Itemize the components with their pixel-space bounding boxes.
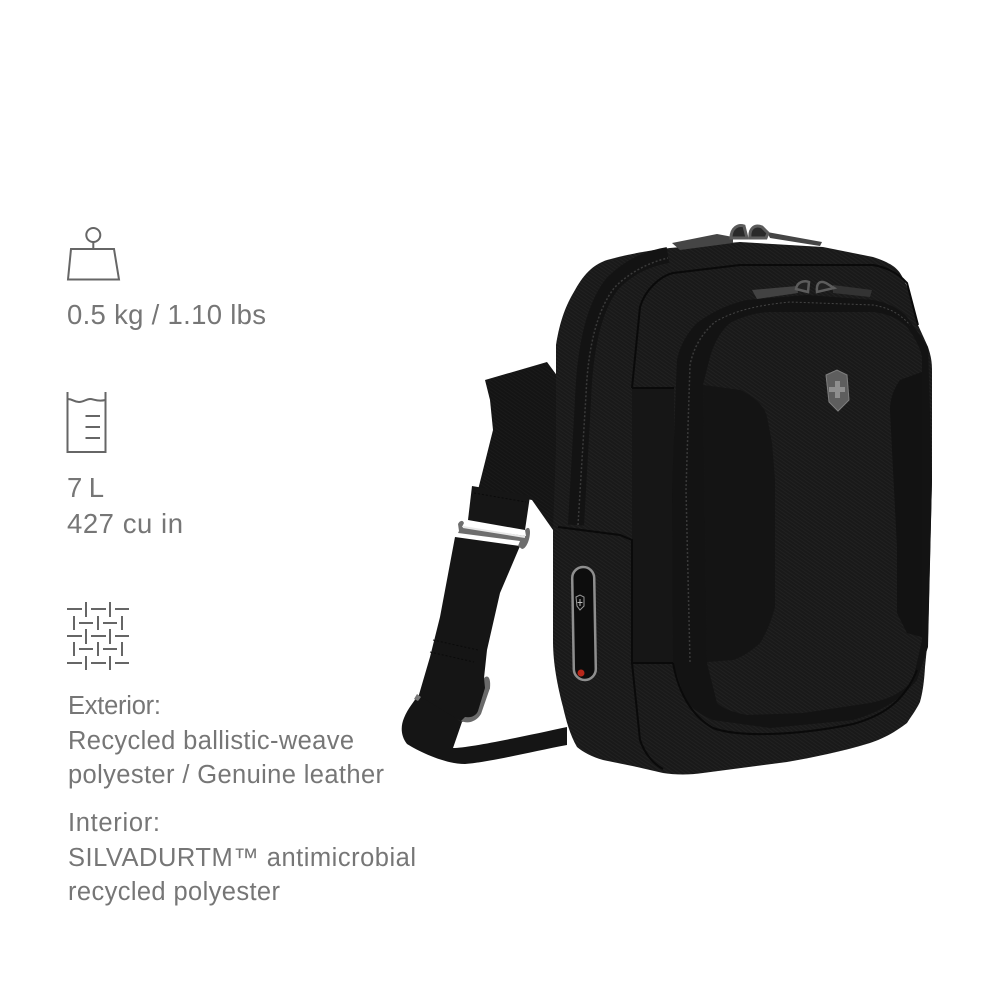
side seams	[558, 388, 674, 769]
volume text	[67, 472, 183, 539]
interior material text	[68, 809, 416, 906]
upper panel seam	[632, 265, 918, 388]
middle dark panel	[632, 388, 674, 663]
pocket zipper stitching	[686, 322, 715, 662]
bag body	[553, 242, 932, 774]
right inner flap	[890, 372, 922, 637]
shoulder strap	[402, 362, 575, 764]
front panel	[703, 312, 922, 715]
left inner flap	[703, 385, 775, 662]
icon: weight	[68, 228, 119, 280]
main zipper channel	[576, 255, 668, 525]
exterior material text: Exterior:	[68, 692, 161, 720]
interior material text: SILVADURTM™ antimicrobial	[68, 844, 416, 872]
side logo plate	[572, 567, 596, 680]
top zipper pulls	[672, 226, 822, 250]
bottom seam	[673, 663, 917, 734]
volume text: 427 cu in	[67, 508, 183, 539]
exterior material text: polyester / Genuine leather	[68, 761, 384, 789]
exterior material text	[68, 692, 384, 789]
exterior material text: Recycled ballistic-weave	[68, 727, 354, 755]
front zipper pulls	[752, 281, 872, 299]
weight text: 0.5 kg / 1.10 lbs	[67, 299, 266, 330]
front pocket	[672, 295, 932, 728]
interior material text: Interior:	[68, 809, 160, 837]
interior material text: recycled polyester	[68, 878, 280, 906]
strap slider	[458, 521, 530, 549]
strap ring	[461, 676, 490, 722]
icon: volume beaker	[68, 392, 106, 452]
emblem	[826, 370, 849, 411]
icon: woven material	[67, 602, 129, 670]
volume text: 7 L	[67, 472, 104, 503]
product photo: crossbody bag	[402, 226, 932, 774]
